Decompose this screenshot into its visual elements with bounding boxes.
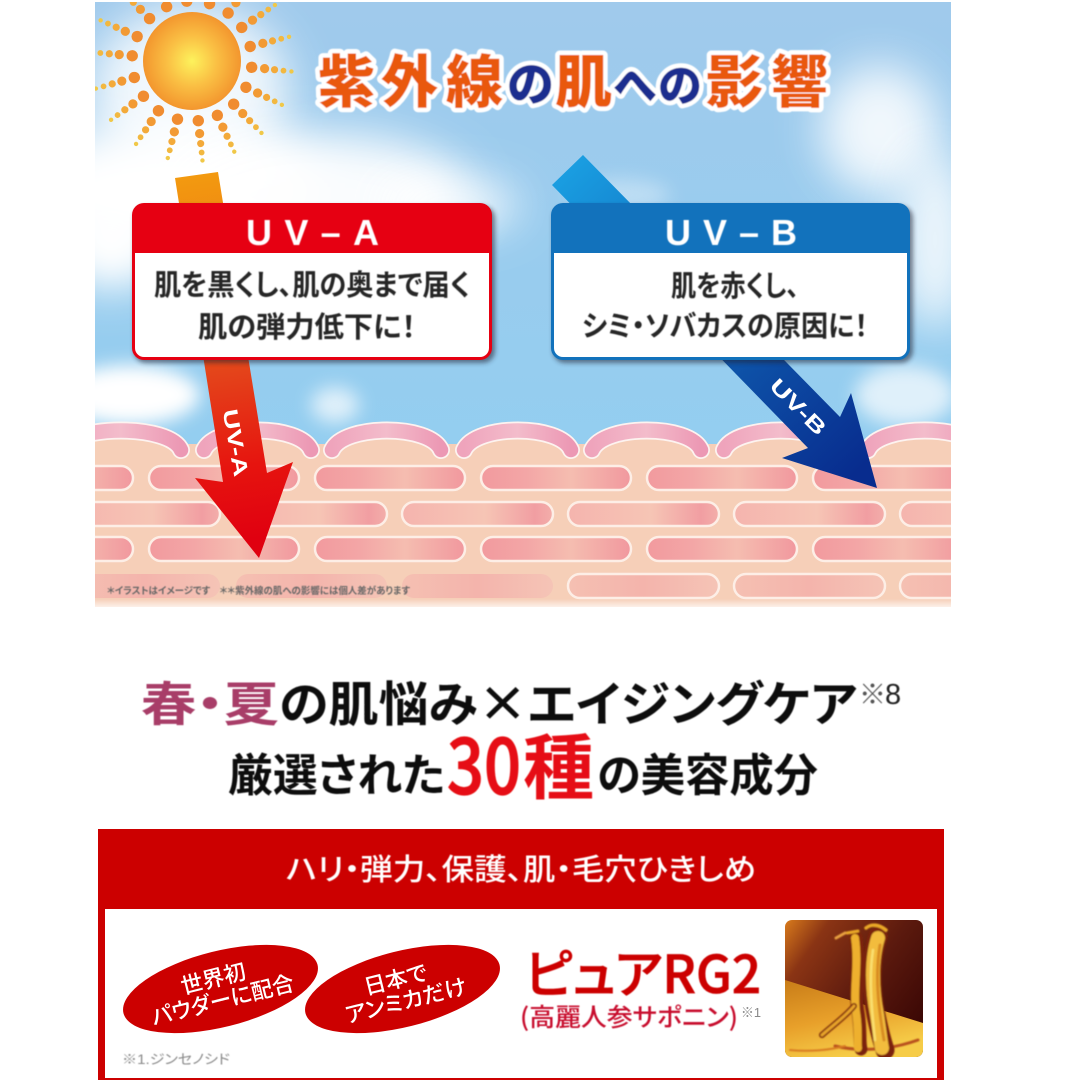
heading: 30 selected beauty ingredients: 厳選された — [228, 750, 445, 801]
photo: ginseng roots — [785, 920, 923, 1057]
skin layers — [95, 422, 951, 607]
badge: only in Japan — [296, 928, 509, 1050]
ingredient name: ピュアRG2 — [525, 933, 761, 1008]
arrow: UV-A — [175, 172, 293, 558]
heading: seasonal aging care: ※ — [859, 673, 886, 712]
clouds — [20, 5, 970, 425]
badge: world first: 世界初 — [178, 959, 248, 999]
card header text: ハリ・弾力、保護、肌・毛穴ひきしめ — [286, 854, 756, 887]
icon: sun with dotted rays — [90, 0, 294, 163]
panel: ingredient card — [98, 829, 944, 1080]
illustration disclaimer: ＊イラストはイメージです ＊＊紫外線の肌への影響には個人差があります — [107, 585, 410, 597]
heading: 30 selected beauty ingredients: 30 — [447, 706, 521, 816]
heading: seasonal aging care: の肌悩み×エイジングケア — [279, 665, 857, 735]
badge: only in Japan: 日本で — [361, 960, 430, 1000]
footnote: ※1.ジンセノシド — [122, 1052, 230, 1067]
UV-A description — [154, 269, 470, 344]
surface cell arcs — [60, 430, 981, 450]
title: 肌 — [555, 51, 612, 115]
badge: only in Japan: アンミカだけ — [343, 974, 469, 1028]
footnote mark: ※1 — [741, 1005, 761, 1020]
arrow: UV-A: UV-A — [218, 407, 252, 478]
title: の — [507, 58, 553, 111]
title — [318, 51, 828, 115]
UV-B description: 肌を赤くし、 — [671, 270, 799, 303]
UV-A description: 肌の弾力低下に！ — [198, 311, 416, 344]
sky background — [95, 2, 951, 444]
title: 影響 — [706, 51, 828, 115]
heading: seasonal aging care: 8 — [885, 679, 901, 711]
callout: UV-A — [132, 203, 495, 363]
heading: 30 selected beauty ingredients: の美容成分 — [597, 750, 818, 801]
skin base — [95, 444, 951, 607]
arrow: UV-B — [552, 155, 877, 488]
heading: 30 selected beauty ingredients: 種 — [523, 730, 594, 809]
UV-B description — [582, 270, 868, 343]
callout: UV-B — [551, 203, 913, 363]
ingredient subtitle: (高麗人参サポニン) — [520, 998, 738, 1034]
badge: world first: パウダーに配合 — [149, 970, 297, 1030]
skin cell rows — [95, 464, 951, 600]
UV-B description: シミ・ソバカスの原因に！ — [582, 311, 868, 343]
UV-A heading: UV–A — [246, 212, 379, 253]
panel: UV skin illustration — [95, 2, 951, 607]
heading: seasonal aging care: 春・夏 — [141, 678, 279, 731]
title: への — [613, 62, 701, 111]
UV-B heading: UV–B — [665, 212, 797, 253]
title: 紫外線 — [318, 51, 503, 115]
badge: world first — [114, 928, 327, 1050]
heading: 30 selected beauty ingredients — [228, 706, 818, 816]
arrow: UV-B: UV-B — [765, 374, 831, 440]
UV-A description: 肌を黒くし、肌の奥まで届く — [154, 269, 470, 302]
